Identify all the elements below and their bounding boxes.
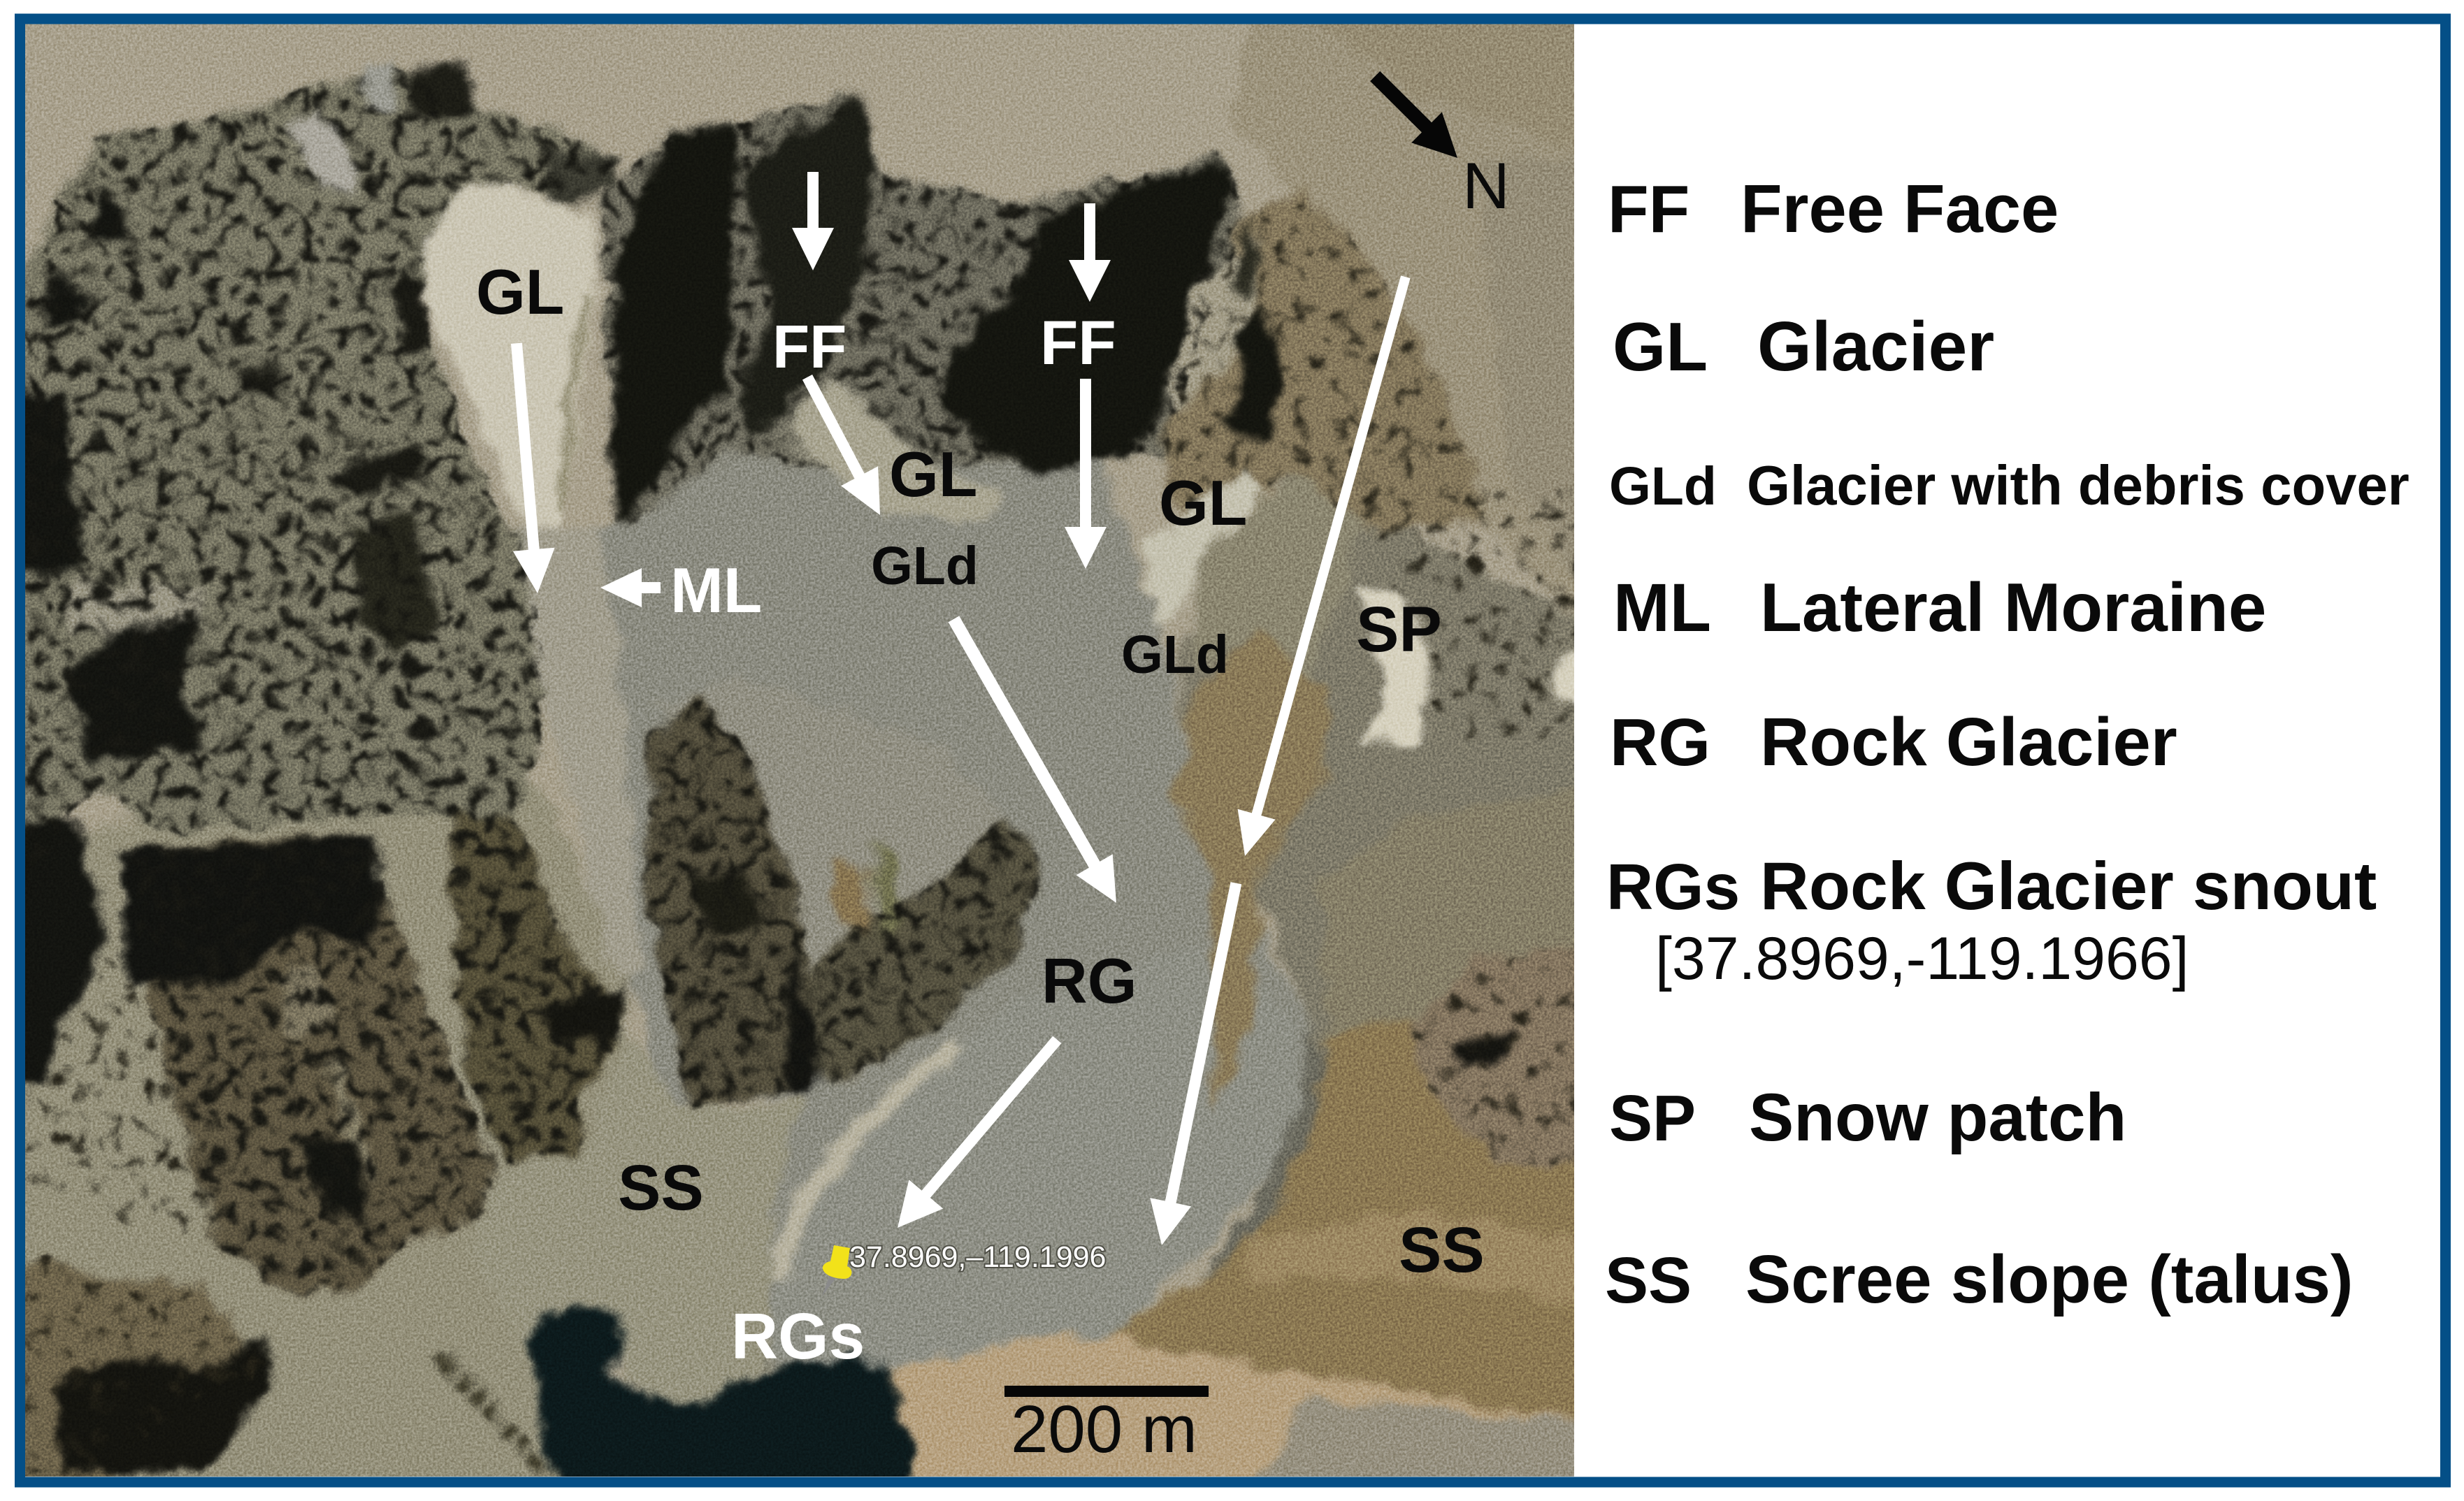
legend item: GL: Glacier xyxy=(1757,307,1994,386)
arrow: rock glacier to snout xyxy=(881,1025,1074,1242)
legend item: RGs xyxy=(1606,848,2377,992)
left lower rocks xyxy=(122,831,492,1296)
legend item: SS: SS xyxy=(1605,1244,1692,1317)
label: pin coordinates: 37.8969,–119.1996 xyxy=(849,1240,1106,1274)
right side xyxy=(1176,471,1603,1068)
label: N: N xyxy=(1462,149,1510,222)
arrow: debris glacier to rock glacier xyxy=(935,609,1134,913)
legend item: GL: GL xyxy=(1613,308,1708,385)
white legend background xyxy=(1574,23,2440,1477)
label: GL 2: GL xyxy=(889,440,977,510)
label: FF 2: FF xyxy=(1040,307,1116,377)
icon: yellow pushpin xyxy=(822,1245,851,1296)
legend item: SS: Scree slope (talus) xyxy=(1745,1240,2354,1317)
legend item: FF: FF xyxy=(1608,172,1690,247)
lower scree xyxy=(456,1021,801,1406)
arrow: free face pointer 2 xyxy=(1069,203,1111,302)
fine grain xyxy=(25,23,1574,1477)
satellite photo terrain xyxy=(0,0,1603,1501)
legend item: RG: RG xyxy=(1610,705,1710,780)
scale bar: 200 m xyxy=(1011,1392,1197,1467)
legend item: RGs: Rock Glacier snout xyxy=(1760,848,2377,924)
arrow: long upper slope arrow xyxy=(1226,272,1425,861)
central hill xyxy=(652,676,1037,1084)
label: GL 3: GL xyxy=(1159,468,1247,539)
legend item: RGs: [37.8969,-119.1966] xyxy=(1655,925,2189,992)
label: RG: RG xyxy=(1042,946,1137,1017)
label: GLd 2: GLd xyxy=(1121,625,1229,685)
label: RGs: RGs xyxy=(731,1300,865,1372)
arrow: lateral moraine pointer xyxy=(600,568,661,607)
label: SS right: SS xyxy=(1399,1214,1485,1286)
label: GL: GL xyxy=(476,257,564,328)
upper dark shadows xyxy=(605,126,739,530)
panel: legend xyxy=(1605,171,2409,1317)
label: ML: ML xyxy=(670,556,762,626)
blocks xyxy=(448,809,626,1163)
legend item: GLd: Glacier with debris cover xyxy=(1747,454,2409,516)
glacier and snow xyxy=(423,187,597,530)
label: SS left: SS xyxy=(618,1152,704,1224)
legend item: RG: Rock Glacier xyxy=(1760,704,2177,780)
lake xyxy=(530,1312,914,1501)
arrow: north xyxy=(1360,61,1473,173)
legend item: SP: Snow patch xyxy=(1749,1080,2126,1155)
arrow: free face down to debris xyxy=(1065,379,1107,569)
sparse speckle xyxy=(0,0,1603,1501)
legend item: ML: ML xyxy=(1613,570,1711,646)
lower right xyxy=(1111,1006,1603,1421)
massif dark shadows xyxy=(80,187,134,240)
upper centre rocks xyxy=(597,94,1241,526)
panel: satellite map xyxy=(0,0,1603,1501)
legend item: GLd: GLd xyxy=(1609,456,1717,516)
lower left fan xyxy=(0,785,628,1501)
arrow: free face to glacier xyxy=(788,368,899,525)
legend item: SP: SP xyxy=(1609,1082,1696,1154)
legend item: ML: Lateral Moraine xyxy=(1760,569,2266,646)
arrow: free face pointer 1 xyxy=(792,172,834,270)
cirque grey xyxy=(519,448,1312,1370)
rock glacier lobes xyxy=(770,943,1297,1370)
arrow: GL flow xyxy=(496,342,559,595)
arrow: long lower slope arrow xyxy=(1141,879,1257,1249)
label: SP: SP xyxy=(1356,594,1442,665)
legend item: GL xyxy=(1613,307,1994,386)
label: GLd 1: GLd xyxy=(871,536,979,596)
massif upper xyxy=(25,64,598,839)
rock speckle xyxy=(0,0,1603,1501)
legend item: RGs: RGs xyxy=(1606,850,1740,923)
trees xyxy=(443,1361,550,1474)
label: FF 1: FF xyxy=(772,313,846,381)
legend item: FF: Free Face xyxy=(1741,171,2059,247)
